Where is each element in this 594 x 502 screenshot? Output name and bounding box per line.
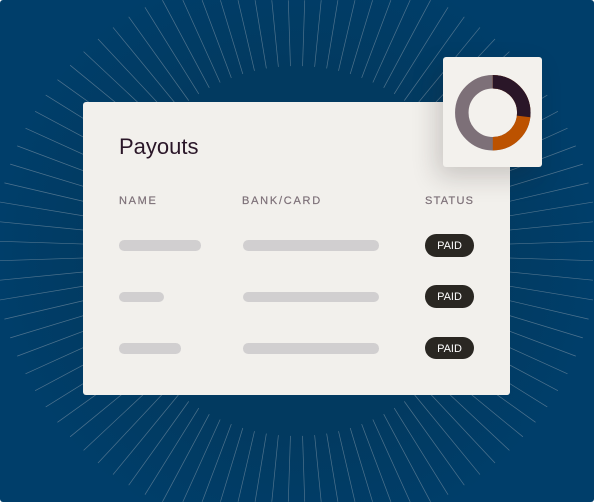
row 3 status badge (425, 337, 474, 359)
column header: bank/card: BANK/CARD (242, 195, 322, 207)
row 2 bank placeholder (242, 292, 379, 302)
row 2 status badge: PAID (437, 291, 462, 303)
column header: name: NAME (119, 195, 158, 207)
row 1 bank placeholder (242, 240, 379, 250)
row 2 name placeholder (119, 292, 164, 302)
row 3 bank placeholder (242, 343, 379, 354)
row 3 status badge: PAID (437, 343, 462, 355)
row 3 name placeholder (119, 343, 180, 354)
row 2 status badge (425, 285, 474, 308)
column header: status: STATUS (425, 195, 474, 207)
heading: Payouts: Payouts (119, 134, 198, 159)
donut chart (455, 75, 531, 150)
row 1 status badge (425, 234, 474, 256)
row 1 status badge: PAID (437, 240, 462, 252)
panel: payouts card (83, 102, 510, 395)
panel: donut chart card (443, 57, 542, 167)
row 1 name placeholder (119, 240, 201, 250)
